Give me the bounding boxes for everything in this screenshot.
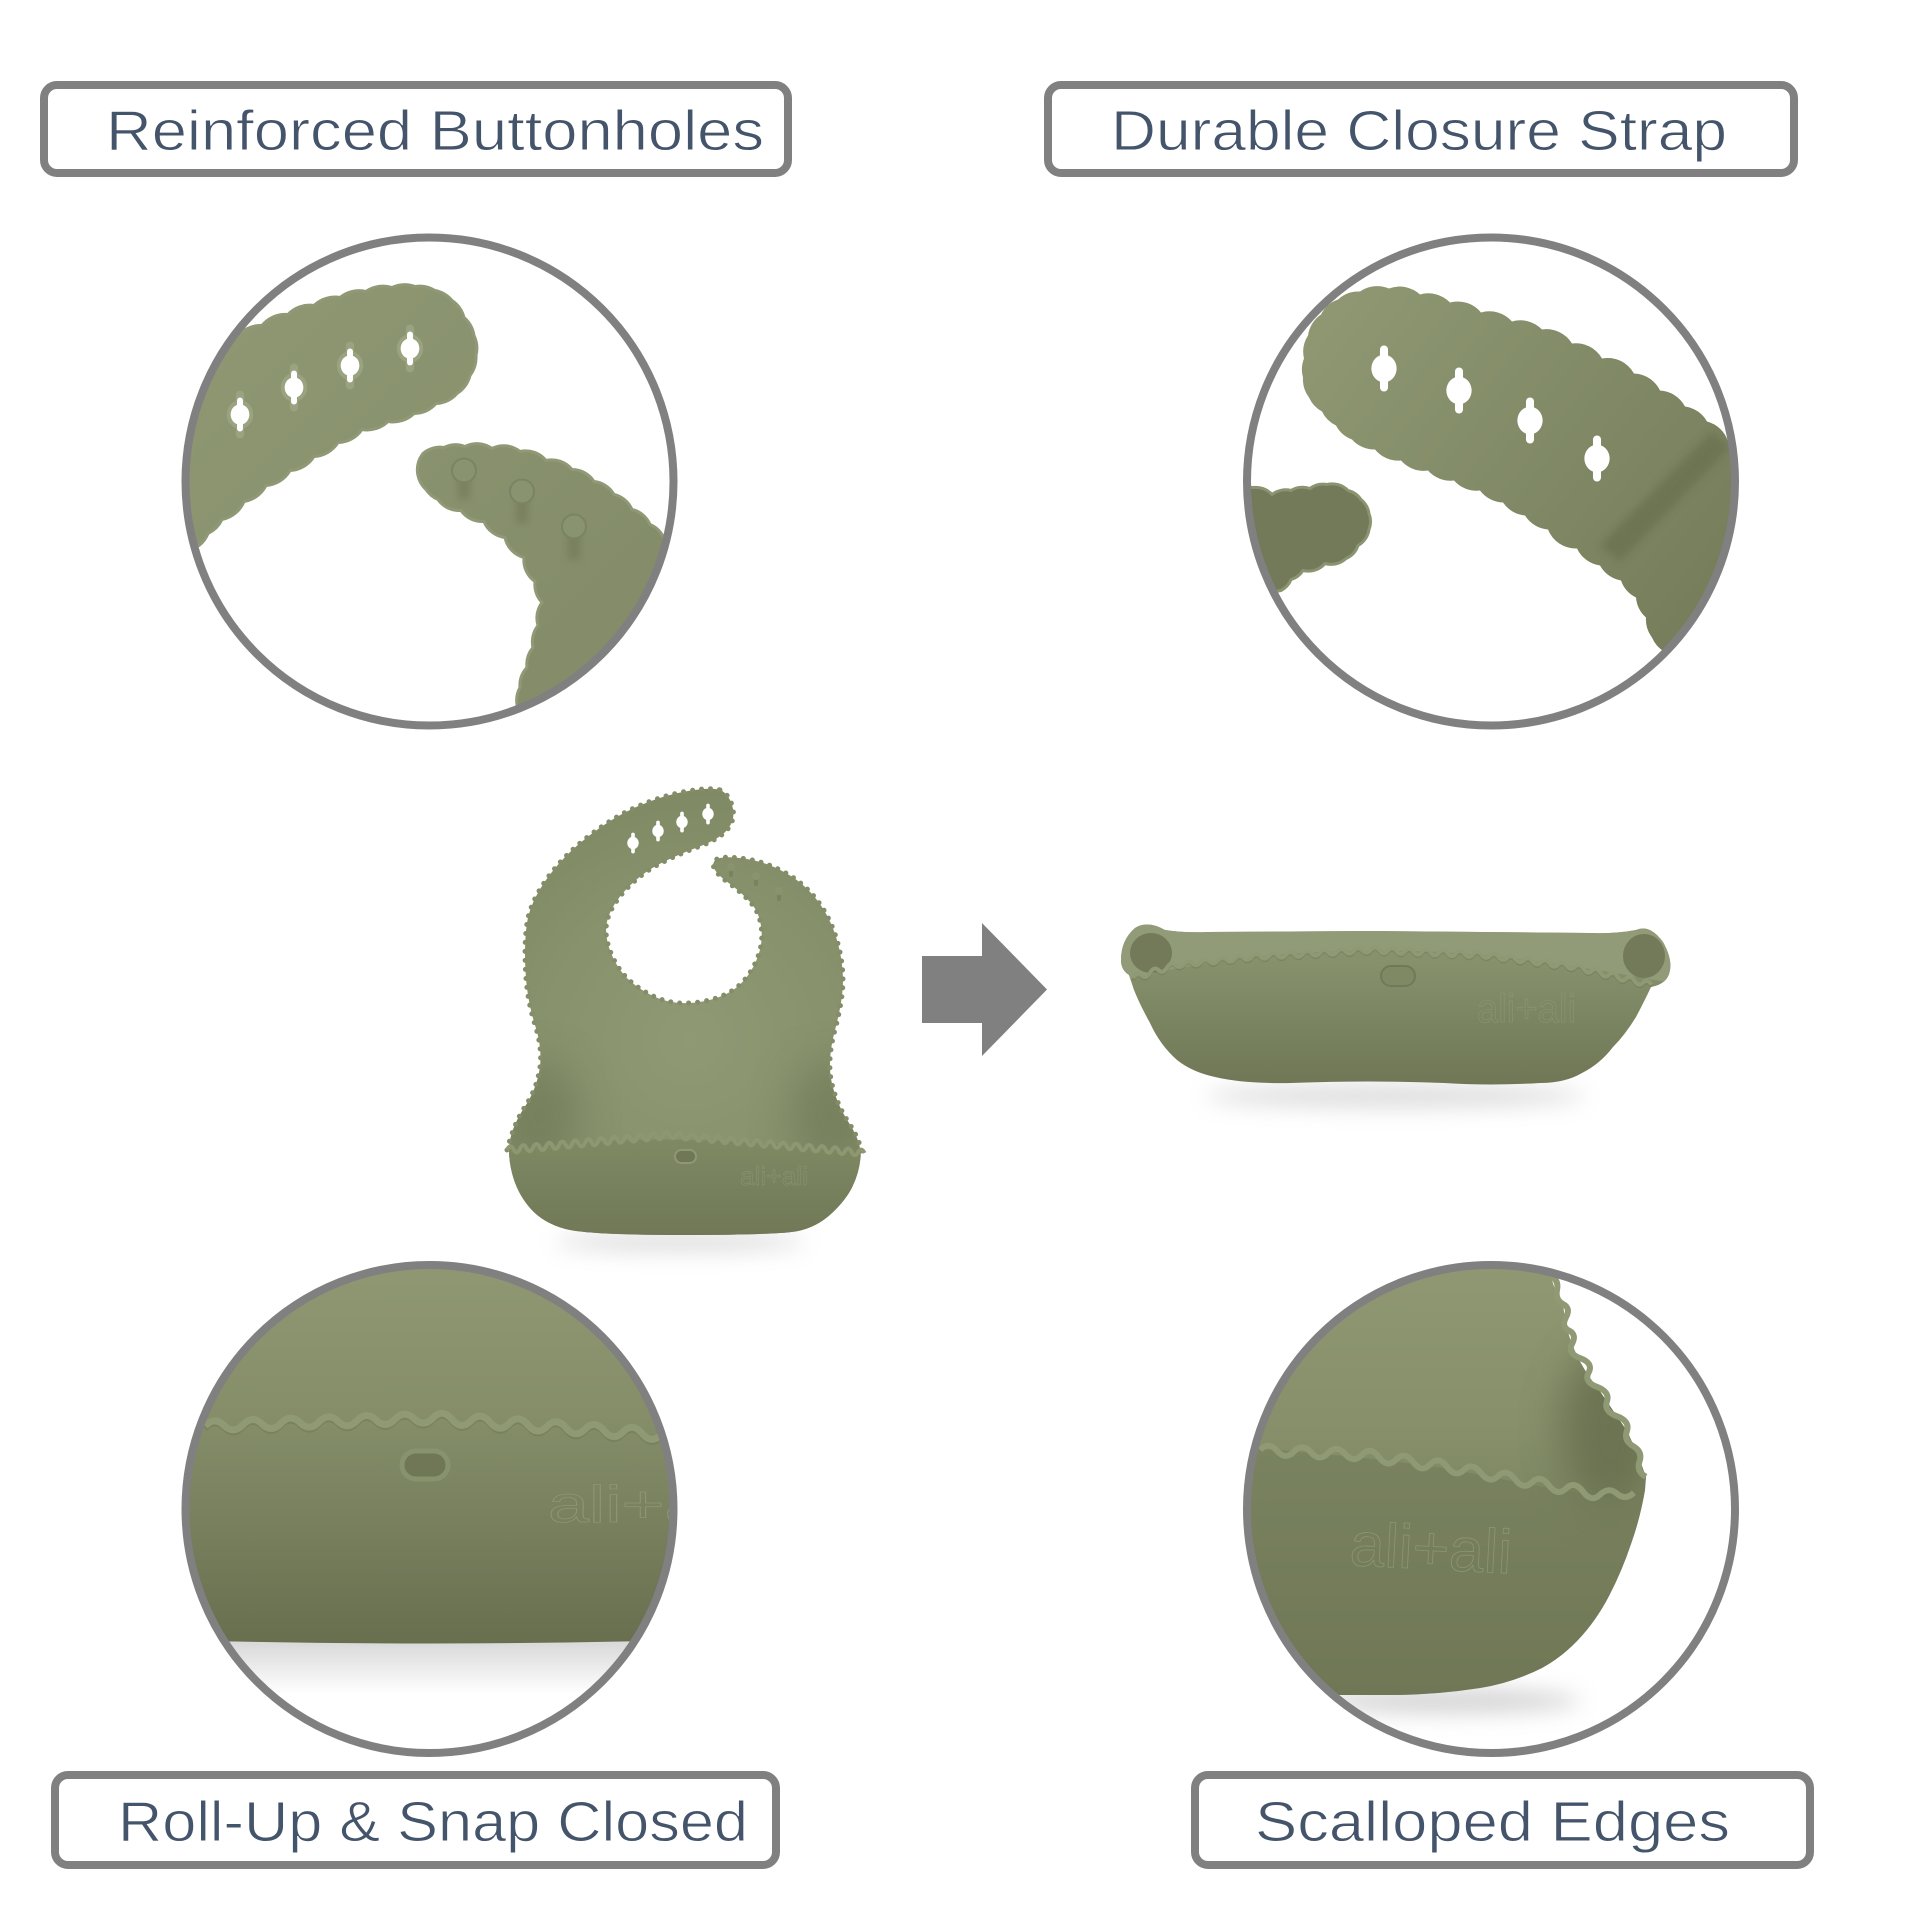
shadow (1320, 1689, 1580, 1713)
snap strap end (1240, 484, 1371, 598)
bib logo: ali+ali (740, 1161, 808, 1191)
bib ridge (507, 1132, 864, 1155)
label: Roll-Up & Snap Closed: Roll-Up & Snap Closed (118, 1790, 748, 1854)
edge ridge (1551, 1276, 1646, 1477)
label: Scalloped Edges: Scalloped Edges (1255, 1790, 1730, 1854)
embossed logo: ali+ali (548, 1476, 738, 1534)
ridge (205, 1413, 661, 1442)
label: Reinforced Buttonholes: Reinforced Buttonholes (106, 99, 764, 163)
silicone surface (190, 1269, 670, 1644)
bib snap slot (675, 1150, 696, 1163)
label: Durable Closure Strap (1048, 85, 1794, 173)
label: Reinforced Buttonholes (44, 85, 788, 173)
product: rolled bib (1110, 915, 1680, 1107)
bib snap buttons (727, 863, 783, 901)
rolled ridge (1133, 947, 1652, 987)
panel: scalloped edges closeup (1230, 1249, 1735, 1753)
bib buttonholes (627, 804, 714, 853)
label: Scalloped Edges (1195, 1775, 1810, 1865)
label: Durable Closure Strap: Durable Closure Strap (1111, 99, 1727, 163)
silicone surface (1230, 1249, 1646, 1695)
strap with buttonholes (190, 283, 478, 548)
rolled snap (1381, 966, 1415, 986)
rolled logo: ali+ali (1477, 987, 1576, 1031)
strap with snap buttons (416, 442, 664, 706)
lower flap (1230, 1447, 1645, 1695)
label: Roll-Up & Snap Closed (55, 1775, 776, 1865)
panel: roll-up and snap closeup (182, 1261, 678, 1757)
fold shading (1560, 1344, 1660, 1514)
cross ridge (1260, 1446, 1634, 1498)
snap slot (402, 1451, 448, 1479)
strap detail (1302, 286, 1731, 650)
arrow (922, 923, 1047, 1056)
embossed logo: ali+ali (1348, 1510, 1514, 1587)
panel: durable closure strap closeup (1240, 238, 1760, 726)
shadow beneath bib (230, 1641, 630, 1682)
product: flat bib (490, 770, 880, 1251)
panel: reinforced buttonholes closeup (182, 234, 678, 730)
